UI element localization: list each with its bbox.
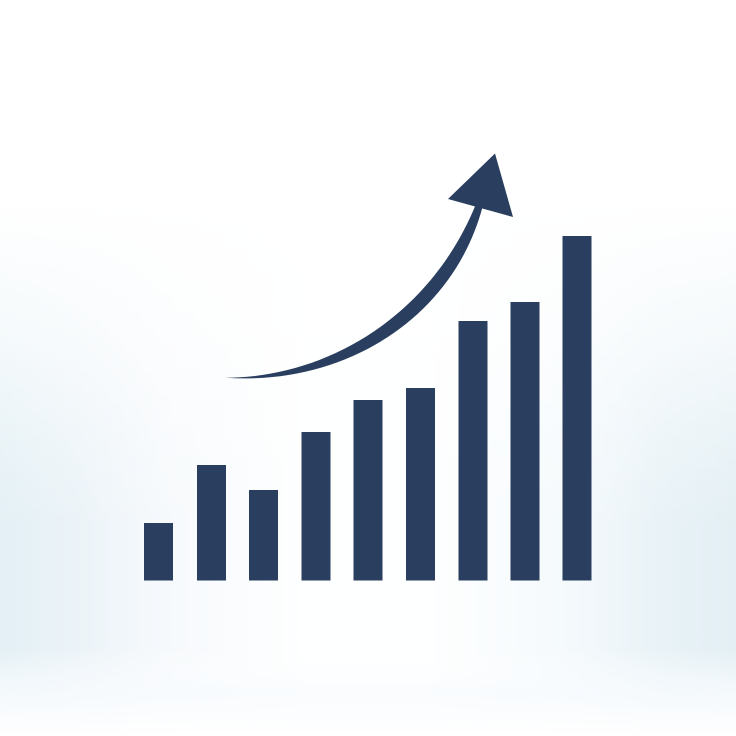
bar chart <box>144 236 592 580</box>
bar 3 <box>249 490 278 580</box>
bar 7 <box>458 321 488 580</box>
bar 6 <box>406 388 435 580</box>
bar 8 <box>510 302 540 580</box>
bar 4 <box>302 432 330 580</box>
bar 9 <box>562 236 592 580</box>
icon: growth arrow <box>225 154 513 378</box>
arrow head <box>448 154 513 217</box>
bar 5 <box>354 400 382 580</box>
arrow shaft <box>225 204 482 378</box>
bar 2 <box>197 465 226 580</box>
bar 1 <box>144 523 173 580</box>
